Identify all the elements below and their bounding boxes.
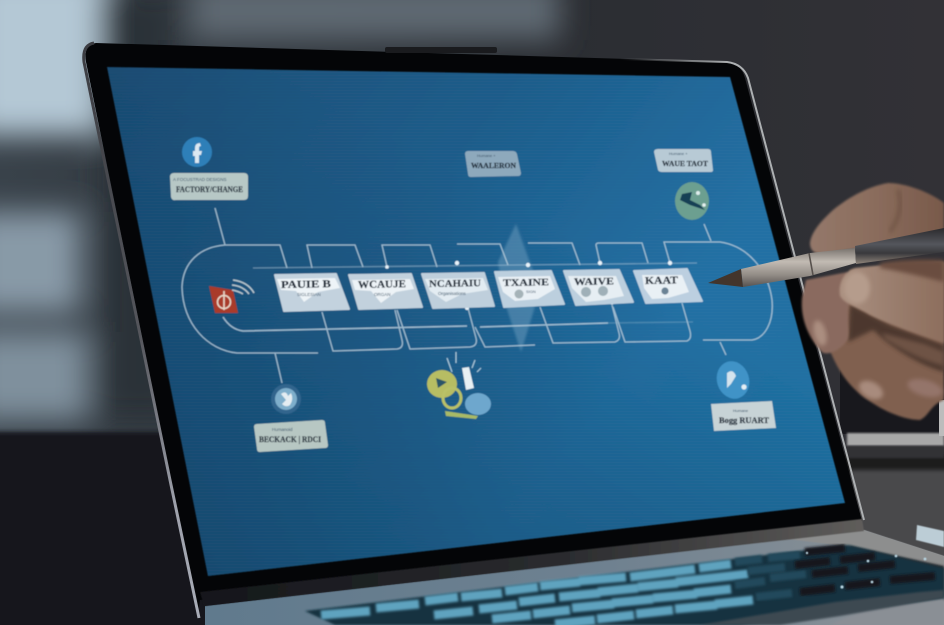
left rim of lid [84,43,199,618]
icon: wifi and red tag [209,280,254,313]
hand holding pen [708,183,944,420]
icon: right blue blob [712,357,754,403]
key glints [806,552,926,589]
card 1 [275,274,349,311]
card 2: WCAUJE [358,279,406,291]
card 3 [422,273,494,308]
label: top right card: WAUE TAOT [662,159,708,168]
flow diagram lines [182,208,772,383]
index finger crease [890,190,900,232]
black bezel [85,43,862,612]
middle finger over pen [840,259,944,343]
label: top right card: Humane + [669,151,688,156]
fingertip at left [802,272,850,353]
label: top centre card: WAALERON [471,162,516,170]
label: bottom right card [711,401,776,431]
translucent light shard [498,224,540,352]
label: top right card [654,149,713,172]
keyboard [305,545,944,625]
label: bottom right card: Bogg RUART [719,416,770,425]
glowing nodes [309,261,672,310]
ring finger section [882,333,944,366]
card 4: TXAINE [503,277,549,289]
label: top centre card [465,151,521,177]
label: top centre card: Humane + [477,153,496,158]
card 5 [564,270,633,305]
icon: top left social circle [182,137,212,167]
space bar row [700,590,944,625]
card 2: ORGAN [374,292,391,297]
label: top left card: FACTORY/CHANGE [176,184,243,194]
palm crease shadows [848,304,944,372]
card 2 [349,274,422,309]
label: bottom right card: Humane [733,408,749,413]
pen [708,228,944,287]
icon: bottom left circle [271,384,301,414]
right rim of lid [620,59,864,520]
card 1: PAUIE B [281,279,331,291]
hinge strip [200,519,864,606]
webcam notch [385,47,497,53]
laptop base [205,530,944,625]
icon: central illustration [427,352,491,419]
card 4: SIGN [526,289,536,294]
label: bottom left card [254,420,328,452]
card 3: NCAHAIU [429,278,481,290]
lower hand and finger [826,262,944,420]
card 5: WAIVE [574,276,614,288]
icon: green blob [675,182,709,220]
label: top left card [170,173,248,200]
index finger [810,183,944,254]
card 4 [495,271,564,307]
label: bottom left card: BECKACK | RDCI [259,434,322,444]
second device behind hand [840,370,944,458]
label: bottom left card: Humanoid [272,427,293,432]
card 6 [634,269,702,303]
card 3: Organisations [438,291,467,296]
card 6: KAAT [645,275,678,287]
screen [107,67,845,576]
card 1: SIGLESIAN [297,292,321,297]
white object at right of keyboard [916,525,944,547]
label: top left card: A FOCUSTRAD DESIGNS [173,177,227,182]
